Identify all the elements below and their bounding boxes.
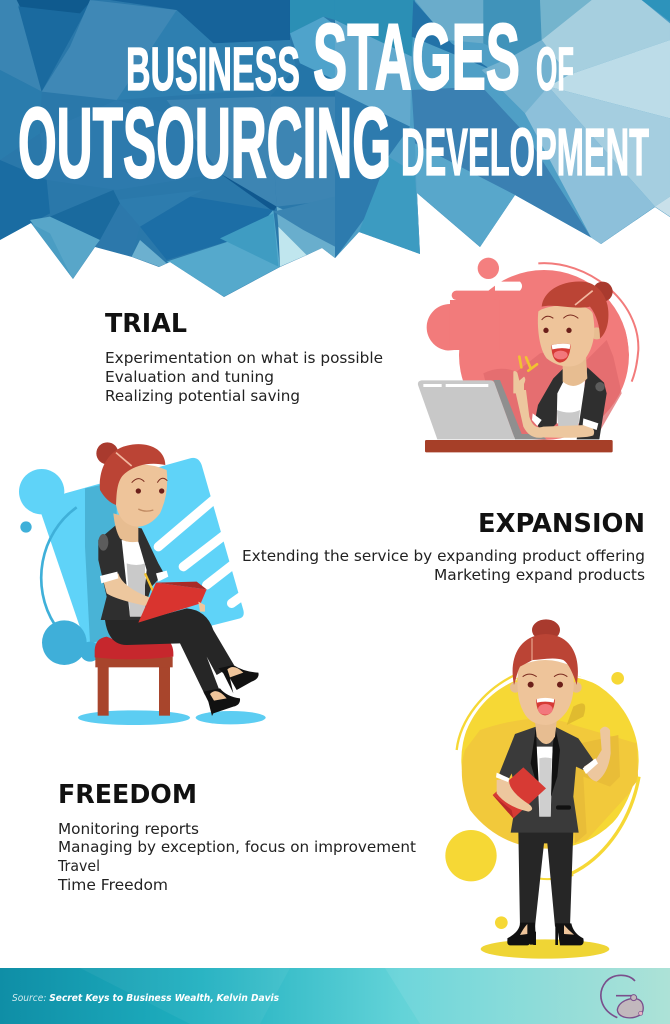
illustration: seated woman with notebook: [19, 442, 266, 725]
text block: trial: Experimentation on what is possible: [105, 349, 383, 367]
footer band: [0, 968, 670, 1024]
desk: [425, 440, 613, 452]
text block: freedom: Monitoring reports: [58, 820, 199, 838]
chair: [95, 637, 173, 716]
source credit: Source: Secret Keys to Business Wealth, Kelvin Davis: [12, 993, 279, 1004]
text block: freedom: FREEDOM: [58, 780, 197, 810]
title: [18, 4, 649, 198]
text block: expansion: Marketing expand products: [434, 566, 645, 584]
text block: trial: Realizing potential saving: [105, 387, 300, 405]
logo: G with mouse: [601, 975, 643, 1018]
laptop: [418, 380, 547, 439]
illustration: standing woman with red book: [445, 619, 641, 959]
text block: expansion: [242, 509, 645, 584]
text block: freedom: [57, 780, 416, 894]
woman: [493, 619, 611, 945]
header polygon banner: [0, 0, 670, 300]
woman: [96, 442, 259, 716]
title: OF: [536, 35, 574, 103]
text block: freedom: Managing by exception, focus on improvement: [58, 838, 416, 856]
illustration: woman at laptop: [418, 258, 638, 452]
text block: expansion: EXPANSION: [478, 509, 645, 539]
text block: expansion: Extending the service by expanding product offering: [242, 547, 645, 565]
title: BUSINESS: [126, 35, 300, 103]
text block: freedom: Time Freedom: [57, 876, 168, 894]
text block: trial: [105, 309, 383, 405]
woman: [513, 281, 613, 439]
text block: freedom: Travel: [57, 857, 100, 875]
text block: trial: Evaluation and tuning: [105, 368, 274, 386]
text block: trial: TRIAL: [105, 309, 187, 339]
